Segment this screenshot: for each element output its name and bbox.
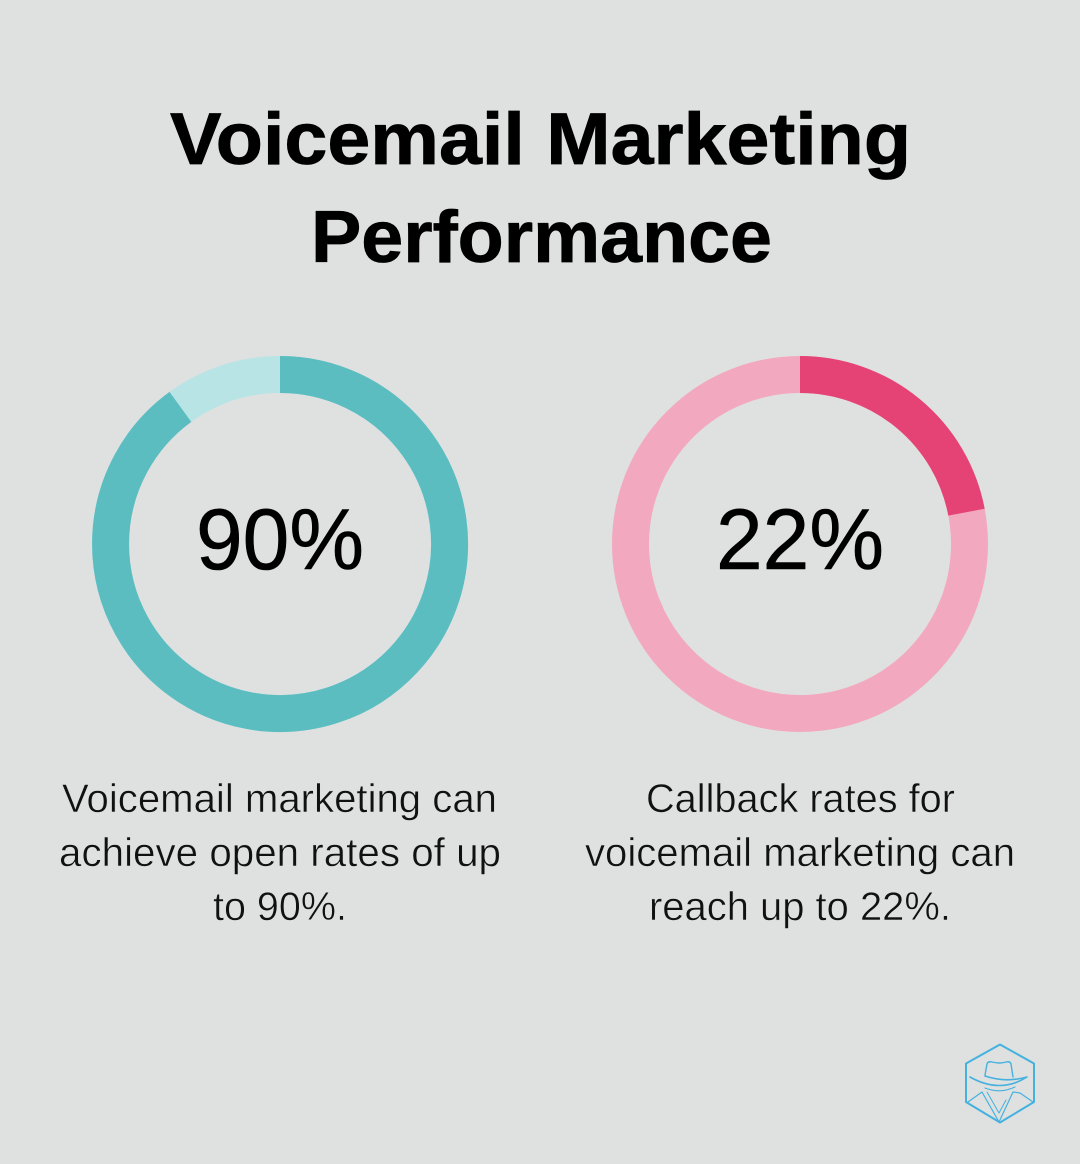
description: open rates: Voicemail marketing can (62, 777, 497, 821)
value: 90%: 90% (196, 492, 364, 588)
description: callback rates: Callback rates for (646, 777, 955, 821)
description: open rates: to 90%. (213, 885, 347, 929)
donut chart: 22% (630, 374, 970, 714)
title (170, 99, 911, 278)
description: callback rates: voicemail marketing can (585, 831, 1015, 875)
description: callback rates: reach up to 22%. (649, 885, 951, 929)
donut chart: 90% (110, 374, 450, 714)
panel: open rates (59, 374, 501, 929)
title: Voicemail Marketing (170, 99, 911, 180)
description: callback rates (585, 777, 1015, 929)
panel: callback rates (585, 374, 1015, 929)
icon: hexagon logo with hat (966, 1044, 1034, 1122)
title: Performance (311, 197, 772, 278)
description: open rates (59, 777, 501, 929)
description: open rates: achieve open rates of up (59, 831, 501, 875)
value: 22%: 22% (716, 492, 884, 588)
